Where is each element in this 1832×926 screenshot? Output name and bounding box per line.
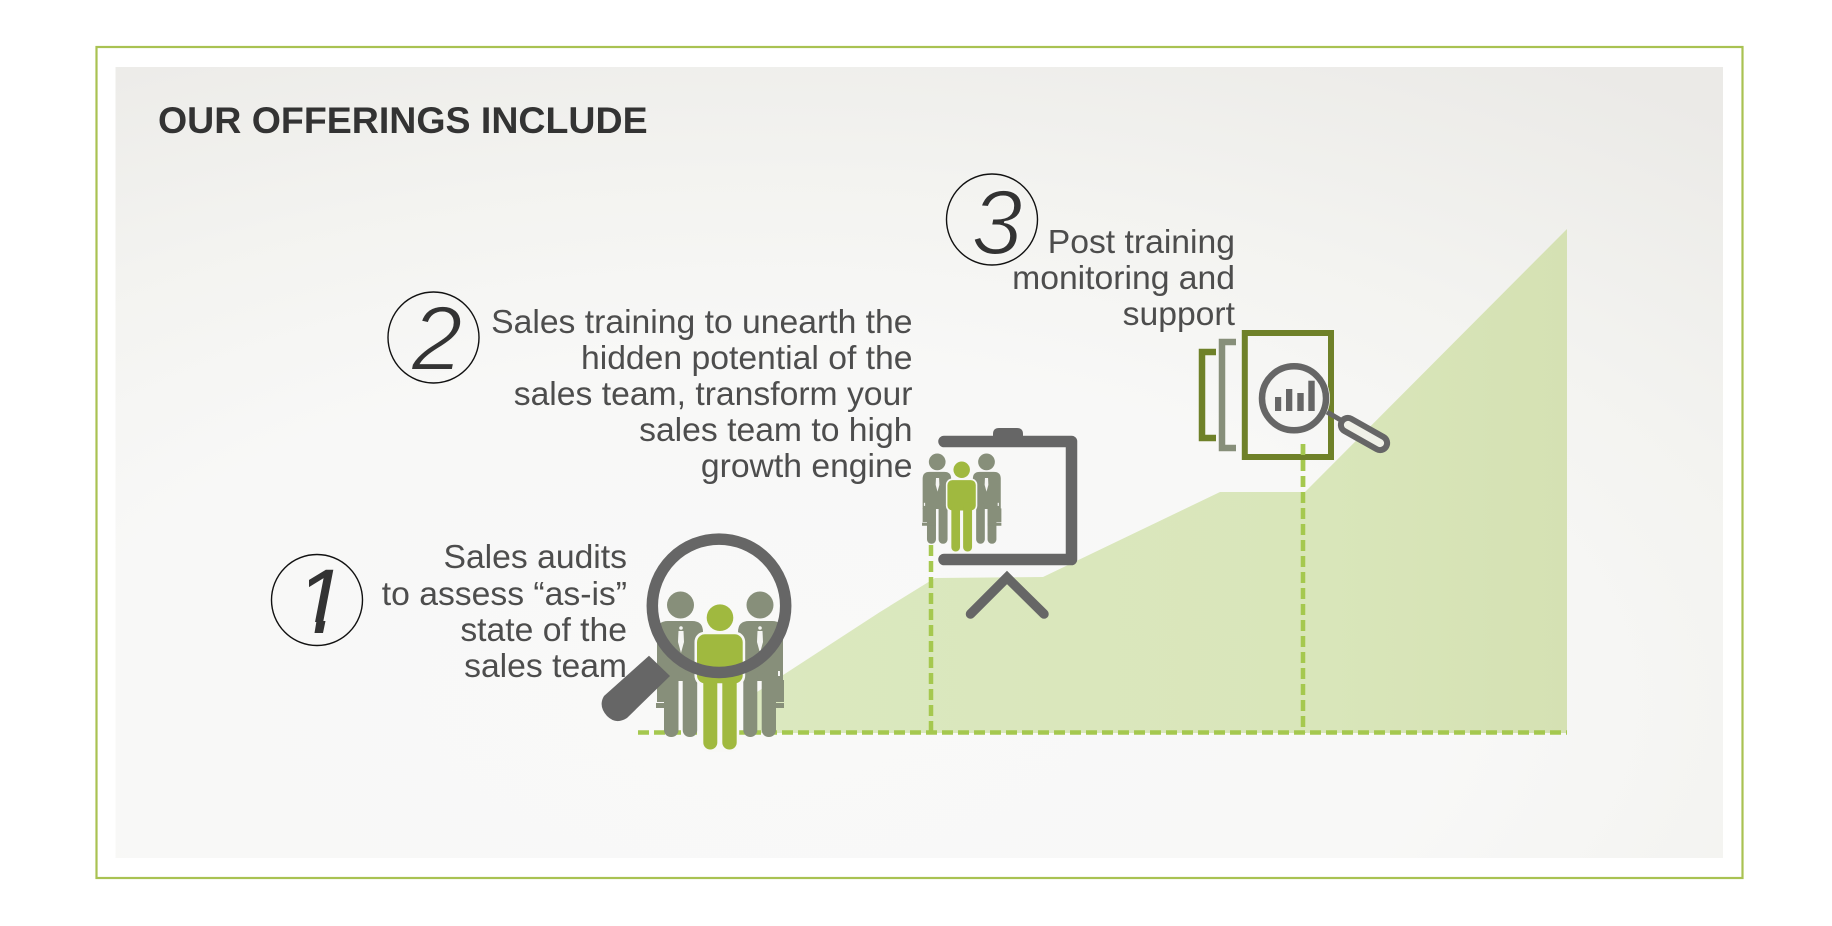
- title: OUR OFFERINGS INCLUDE: [158, 99, 648, 141]
- step 2 text: Sales training to unearth the: [491, 303, 912, 341]
- step 2 text: sales team to high: [639, 411, 912, 449]
- dashed axis and drop lines: [638, 444, 1567, 733]
- step 2 number: [388, 288, 479, 390]
- background panel: [116, 67, 1723, 858]
- step 3 text: monitoring and: [1012, 259, 1235, 297]
- green person halo: [694, 632, 745, 752]
- lens halo: [1258, 362, 1330, 434]
- step 3 text: [1012, 223, 1236, 333]
- step 1 text: to assess “as-is”: [382, 575, 627, 613]
- step 3 text: Post training: [1048, 223, 1235, 261]
- step 1 text: state of the: [460, 611, 627, 649]
- green centre person: [697, 604, 743, 750]
- board frame: [944, 442, 1072, 560]
- lens ring: [1262, 366, 1326, 430]
- icon: team under magnifier: [602, 539, 786, 752]
- document: [1245, 333, 1331, 457]
- step 3 number: [946, 172, 1038, 274]
- board stand: [970, 578, 1044, 614]
- step 1 number: [272, 551, 362, 653]
- step 1 text: Sales audits: [443, 538, 627, 576]
- step 2 number: 2: [410, 288, 463, 390]
- step 3 text: support: [1123, 295, 1236, 333]
- step 1 number: 1: [294, 551, 346, 653]
- lens connector: [1327, 412, 1344, 422]
- step 2 text: growth engine: [701, 447, 912, 485]
- area chart: growth: [757, 229, 1567, 733]
- small team: [922, 454, 1001, 553]
- right grey person: [738, 592, 784, 737]
- lens handle: [1338, 415, 1390, 453]
- step 3 number: 3: [971, 172, 1023, 274]
- icon: presentation board with team: [922, 428, 1072, 614]
- step 2 text: sales team, transform your: [514, 375, 912, 413]
- step 2 text: hidden potential of the: [581, 339, 912, 377]
- magnifier handle: [602, 656, 670, 721]
- step 1 text: [382, 538, 627, 685]
- back bracket grey: [1222, 342, 1236, 448]
- icon: document with magnifier and bars: [1202, 333, 1390, 457]
- step 2 text: [491, 303, 912, 485]
- drop line over document: [1301, 444, 1305, 492]
- left grey person: [656, 592, 703, 737]
- board clip: [993, 428, 1023, 440]
- step 1 text: sales team: [464, 647, 627, 685]
- back bracket olive: [1202, 352, 1216, 438]
- mini bar chart: [1275, 381, 1315, 411]
- magnifier ring: [652, 539, 786, 672]
